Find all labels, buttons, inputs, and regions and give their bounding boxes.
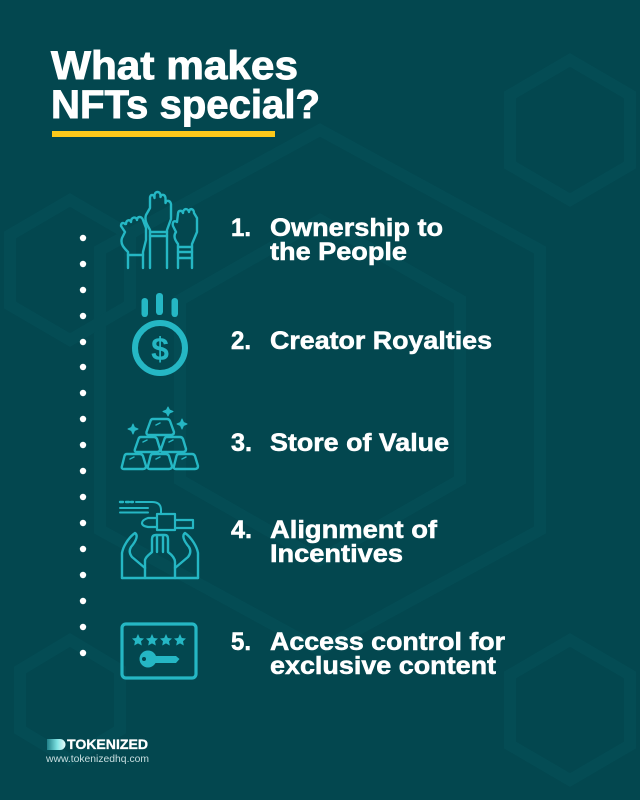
title underline [52, 131, 275, 137]
stars [132, 634, 186, 646]
icon: coin with falling drops [135, 293, 185, 373]
title [51, 44, 320, 127]
icon: gold bars pyramid [122, 407, 198, 469]
website url: www.tokenizedhq.com [45, 753, 149, 765]
icon: plug and hands [120, 502, 198, 578]
icon: raised hands [121, 192, 197, 268]
list item 4: Alignment of [270, 516, 438, 544]
list item 1 [231, 214, 443, 266]
list item 2: 2. [231, 327, 251, 355]
list item 5 [231, 628, 505, 680]
list item 5: Access control for [270, 628, 505, 656]
list item 4: 4. [231, 516, 252, 544]
icon: password key card [122, 624, 196, 678]
list item 5: 5. [231, 628, 251, 656]
list item 3: Store of Value [270, 429, 449, 457]
dotted timeline [80, 235, 86, 656]
list item 3: 3. [231, 429, 252, 457]
key [140, 650, 180, 668]
logo: TOKENIZED [67, 737, 148, 752]
list item 5: exclusive content [270, 652, 497, 680]
title: NFTs special? [51, 83, 320, 127]
list item 2: Creator Royalties [270, 327, 492, 355]
dollar sign: $ [151, 331, 169, 367]
list item 1: Ownership to [270, 214, 443, 242]
list item 1: 1. [231, 214, 251, 242]
list item 1: the People [270, 238, 407, 266]
list item 4: Incentives [270, 540, 403, 568]
list item 4 [231, 516, 438, 568]
title: What makes [51, 44, 298, 88]
